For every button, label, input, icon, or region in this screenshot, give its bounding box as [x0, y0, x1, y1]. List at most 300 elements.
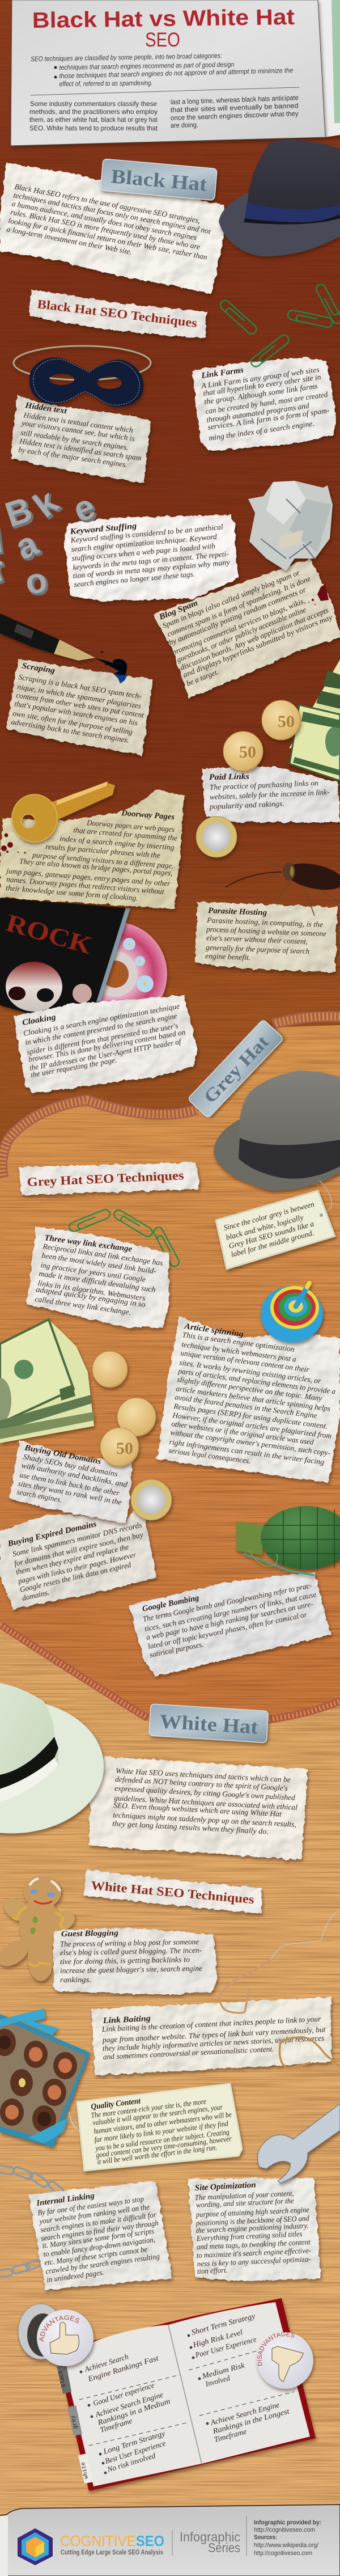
body text: guidelines. White Hat techniques are associated with ethical — [114, 1794, 298, 1812]
note text: Grey Hat SEO sounds like a — [228, 1219, 315, 1250]
body text: advertising back to the search engines. — [11, 717, 130, 745]
body text: expressed quality desires, by citing Google's own published — [114, 1784, 295, 1802]
series label: Series — [208, 2540, 240, 2555]
credits: http://cognitiveseo.com — [254, 2527, 315, 2533]
body text: right infringements can result in the writer facing — [169, 1437, 325, 1466]
body text: adapted quickly by engaging in so — [36, 1285, 146, 1309]
body text: in which the content presented to the search engine — [24, 1012, 177, 1047]
dashed dividers — [79, 2350, 294, 2446]
icon: eye mask — [14, 346, 151, 407]
badge: Black Hat — [100, 159, 217, 200]
body text: They are also known as bridge pages, portal pages, — [19, 857, 173, 877]
body text: A Link Farm is any group of web sites — [200, 365, 320, 390]
body text: search engines is to make it difficult for — [40, 2210, 157, 2234]
badge: advantages: ADVANTAGES — [39, 2315, 79, 2342]
body text: far more likely to link to your website if they find — [94, 2119, 229, 2144]
body text: tices, such as creating large numbers of links, that cause — [144, 1590, 317, 1633]
body text: The practice of purchasing links on — [209, 779, 318, 792]
heading: Paid Links — [209, 772, 249, 782]
heading: Doorway Pages — [121, 809, 175, 822]
series label — [180, 2530, 240, 2555]
tab: white: white — [80, 2461, 90, 2480]
body text: parts of articles, and replacing elements to provide a — [177, 1367, 336, 1396]
body text: unique version of relevant content on their — [180, 1348, 310, 1374]
body text: search engine optimization technique. Keyword — [71, 532, 218, 553]
heading: Parasite Hosting — [208, 906, 267, 917]
intro text: techniques that search engines recommend as part of good design — [59, 61, 235, 71]
panel: google bombing — [129, 1572, 332, 1677]
body text: Cloaking is a search engine optimization technique — [23, 1002, 180, 1038]
credits: http://cognitiveseo.com — [254, 2550, 312, 2557]
body text: serious legal consequences. — [168, 1446, 251, 1465]
title: Black Hat vs White Hat — [32, 5, 295, 33]
tab: black — [57, 2364, 71, 2394]
icon: chocolate box — [0, 2008, 90, 2147]
right column: that their sites will eventually be banned — [171, 101, 299, 114]
body text: be a target. — [185, 667, 220, 688]
main page — [11, 0, 325, 146]
body text: called three way link exchange. — [35, 1295, 131, 1317]
body text: Doorway pages are web pages — [86, 818, 175, 834]
body text: Parasite hosting, in computing, is the — [206, 916, 323, 929]
body text: page from another website. The types of link bait vary tremendously, but — [101, 2025, 326, 2044]
panel: blog spam — [153, 559, 340, 699]
body text: to maximize it's search engine effective- — [196, 2246, 311, 2260]
intro text — [31, 52, 294, 88]
left page: black hat advantages: Engine Rankings Fast — [86, 2353, 160, 2383]
body text: etc. Many of these scripts cannot be — [44, 2245, 148, 2267]
body text: your visitors cannot see, but which is — [20, 418, 135, 443]
heading: Site Optimization — [194, 2180, 256, 2193]
body text: purpose of attaining high search engine — [196, 2205, 309, 2219]
panel: doorway pages — [0, 790, 184, 909]
body text: without the copyright owner's permission, such copy- — [170, 1428, 332, 1457]
body text — [209, 779, 330, 811]
heading: Guest Blogging — [61, 1928, 118, 1939]
heading: Blog Spam — [158, 598, 199, 622]
left page: white hat advantages — [99, 2429, 167, 2474]
icon: white hat — [0, 1683, 104, 1833]
body text: search engines no longer use these tags. — [74, 569, 195, 589]
body text: Scraping is a black hat SEO spam tech- — [18, 672, 143, 700]
heading: Buying Old Domains — [23, 1443, 102, 1466]
body text: techniques and tactics that focus only on search engines and not — [12, 191, 212, 236]
body text: the group. Although some link farms — [203, 382, 318, 406]
thumbs down — [272, 2346, 303, 2382]
body text: purpose of sending visitors to a different page. — [32, 851, 174, 870]
body text: lated or off topic keyword phases, often for comical or — [147, 1610, 308, 1651]
body text — [162, 568, 333, 688]
left page: white hat advantages: Best User Experience — [104, 2439, 167, 2465]
body text: results for particular phrases with the — [45, 842, 160, 860]
body text: you to be a solid resource on their subject. Creating — [94, 2127, 230, 2152]
icon: wrench — [257, 2104, 340, 2183]
body text: browser. This is done by delivering content based on — [28, 1027, 186, 1064]
body text: tion effort. — [197, 2266, 228, 2275]
body text: can be created by hand, most are created — [205, 390, 329, 416]
torn paper — [0, 163, 224, 294]
tag string — [320, 1181, 332, 1215]
body text: that are created for spamming the — [73, 826, 177, 842]
body text: pages with links to their pages. However — [16, 1550, 137, 1585]
body text: Black Hat SEO refers to the use of aggressive SEO strategies, — [14, 182, 201, 225]
left page: black hat advantages: Achieve Search — [83, 2352, 130, 2374]
body text: their knowledge use some form of cloaking. — [6, 883, 138, 902]
body text: avoid the feared penalties in the Search Engine — [175, 1393, 317, 1420]
body text — [23, 1002, 186, 1079]
body text: The terms Google bomb and Googlewashing refer to prac- — [142, 1581, 313, 1623]
icon: grenade — [236, 1506, 340, 1575]
body text: process of hosting a website on someone — [206, 925, 326, 938]
note text: black and white, logically — [225, 1213, 304, 1242]
body text: ming the index of a search engine. — [208, 419, 315, 442]
body text: a web page to have a high ranking for searches on unre- — [146, 1600, 314, 1642]
body text: defended as NOT being contrary to the spirit of Google's — [115, 1775, 288, 1792]
body text: positioning is the backbone of SEO and — [196, 2214, 309, 2227]
body text: index of a search engine by inserting — [60, 834, 175, 852]
body text: it. Many sites use some form of scripts — [41, 2227, 155, 2250]
panel: article spinning — [157, 1317, 340, 1483]
intro text: SEO techniques are classified by some people, into two broad categories: — [31, 52, 222, 63]
note text — [223, 1200, 315, 1259]
tab: black: black — [57, 2370, 67, 2388]
book pages — [65, 2302, 310, 2486]
tab: white — [78, 2454, 94, 2484]
badge: Grey Hat: Grey Hat — [199, 1031, 273, 1107]
left page: grey hat advantages: Rankings in a Medium — [96, 2397, 171, 2427]
body text: rankings. — [60, 1976, 91, 1984]
panel: footer book: SEO — [136, 2532, 164, 2549]
credits: http://www.wikipedia.org/ — [254, 2542, 319, 2549]
body text: Link baiting is the creation of content that incites people to link to your — [101, 2015, 321, 2033]
icon: grey hat — [214, 1071, 340, 1191]
heading: Cloaking — [22, 1013, 57, 1027]
heading: White Hat SEO Techniques — [84, 1869, 262, 1914]
right column: are doing. — [171, 121, 198, 129]
body text: been the most widely used link build- — [41, 1251, 157, 1275]
body text: by automatically posting random comments or — [168, 585, 308, 647]
body text: By far one of the easiest ways to stop — [37, 2194, 144, 2217]
body text: slightly different perspective on the topic. Many — [177, 1375, 322, 1403]
panel: parasite hosting — [195, 902, 337, 972]
body text: Reciprocal links and link exchange has — [42, 1242, 164, 1267]
body text: the user requesting the page. — [30, 1055, 117, 1079]
body text: human visitors, and to other webmasters who will be — [94, 2110, 232, 2135]
icon: black hat — [219, 139, 340, 256]
body text: stuffing occurs when a web page is loaded with — [71, 542, 216, 562]
heading: Grey Hat SEO Techniques — [19, 1162, 199, 1195]
body text: good content can be very time-consuming, however — [96, 2134, 232, 2159]
badge: White Hat — [149, 1704, 269, 1743]
body text: use them to link back to the other — [19, 1470, 121, 1498]
body text: The process of writing a blog post for someone — [60, 1938, 199, 1948]
body text — [200, 365, 330, 442]
body text — [11, 672, 145, 745]
icon: gingerbread man — [0, 1876, 78, 1981]
spine — [168, 2325, 202, 2464]
body text: promoting commercial services to blogs, wikis, — [171, 597, 307, 657]
credits: Sources: — [254, 2534, 277, 2541]
body text: that's popular with search engines on his — [14, 699, 138, 727]
heading: Google Bombing — [142, 1593, 200, 1614]
button back — [18, 2304, 63, 2359]
series label: Infographic — [180, 2530, 240, 2544]
icon: key — [12, 781, 115, 842]
body text: nique, in which the spammer plagiarizes — [17, 682, 142, 710]
body text — [101, 2015, 326, 2061]
body text: The more content-rich your site is, the more — [91, 2097, 207, 2120]
panel: quality content tag — [69, 2084, 242, 2171]
heading: Quality Content — [91, 2096, 142, 2112]
body text: jump pages, gateway pages, entry pages and by other — [5, 866, 171, 888]
right page: white hat disadvantages: Timeframe — [213, 2427, 248, 2444]
right page: black hat disadvantages: High Risk Level — [192, 2328, 244, 2349]
body text — [35, 1242, 164, 1317]
body text: other websites or if the original article was used — [171, 1419, 314, 1446]
body text: This is a search engine optimization — [182, 1330, 295, 1353]
body text: a human audience, and usually does not obey search engines — [11, 199, 198, 242]
body text: The manipulation of your content, — [194, 2189, 294, 2202]
body text: generally for the purpose of search — [206, 943, 310, 955]
body text: tion of words in meta tags may explain why many — [73, 558, 230, 580]
icon: metal letters: B — [1, 490, 37, 535]
body text: services. A link farm is a form of spam- — [207, 406, 330, 432]
body text: that all hyperlink to every other site in — [202, 373, 322, 397]
tag card — [77, 2084, 242, 2171]
thumbs up — [50, 2322, 79, 2354]
left page: white hat advantages: Long Term Strategy — [101, 2429, 166, 2456]
chocolates — [0, 2029, 77, 2133]
body text — [18, 411, 142, 469]
right column: last a long time, whereas black hats anticipate — [171, 94, 299, 106]
icon: metal letters — [0, 482, 100, 602]
body text — [6, 182, 212, 261]
panel: hidden text — [11, 346, 151, 483]
panel: site optimization — [188, 2178, 321, 2281]
album title: ROCK — [3, 909, 95, 959]
panel: buying old domains — [10, 1440, 132, 1524]
right page: white hat disadvantages — [206, 2400, 291, 2444]
body text: crawled by the search engines resulting — [45, 2252, 160, 2275]
icon: compact disc — [63, 922, 167, 1026]
icon: fishing hooks — [219, 1909, 340, 2069]
body text: made it more difficult devaluing such — [39, 1269, 156, 1294]
icon: coins: 50 — [239, 743, 256, 762]
body text — [194, 2189, 311, 2275]
body text: rules. Black Hat SEO is more frequently used by those who are — [10, 208, 201, 251]
body text: White Hat SEO uses techniques and tactics which can be — [116, 1766, 291, 1784]
body text: in unindexed pages. — [46, 2268, 105, 2284]
icon: blood splatter — [1, 834, 26, 854]
icon: dollar bills — [0, 1319, 94, 1443]
body text: satirical purposes. — [149, 1640, 205, 1659]
icon: paper clips — [218, 283, 340, 369]
panel: black hat description — [0, 163, 224, 294]
body text: they include highly informative articles or news stories, useful resources — [102, 2034, 325, 2053]
right column: once the search engines discover what they — [171, 109, 299, 122]
body text: for domains that will expire soon, then buy — [13, 1530, 144, 1568]
left column: Some industry commentators classify these — [30, 100, 157, 108]
right page: grey hat disadvantages — [198, 2361, 246, 2388]
body text: them when they expire and replace the — [15, 1542, 130, 1576]
book cover — [65, 2298, 316, 2491]
skull — [6, 962, 62, 1012]
left column — [29, 100, 158, 132]
body text: domains. — [21, 1588, 50, 1602]
credits: Infographic provided by: — [254, 2519, 321, 2526]
body text — [11, 1520, 144, 1602]
body text: still readable by the search engines. — [20, 428, 129, 452]
left page: grey hat advantages: Achieve Search Engine — [94, 2390, 164, 2419]
panel: paid links — [202, 767, 340, 822]
panel: guest blogging — [53, 1928, 217, 1995]
body text: sites they want to rank well in the — [17, 1479, 122, 1507]
body text — [37, 2194, 160, 2284]
icon: cockroach — [226, 859, 340, 916]
body text — [60, 1938, 202, 1984]
body text: Some link spammers monitor DNS records — [11, 1520, 143, 1558]
icon: coins: 50 — [116, 1439, 133, 1458]
icon: ink blot — [95, 651, 128, 683]
heading: Black Hat SEO Techniques — [29, 289, 207, 339]
body text: and meta tags, to tweaking the content — [196, 2237, 311, 2251]
heading: Black Hat SEO Techniques: Black Hat SEO Techniques — [36, 297, 198, 330]
body text: your website from ranking well on the — [38, 2202, 150, 2226]
body text: Results pages (SERP) for using duplicate content. — [173, 1402, 328, 1431]
heading: Hidden text — [24, 401, 68, 416]
body text: However, if the original articles are plagiarized from — [172, 1411, 332, 1440]
icon: dollar bills — [289, 659, 340, 781]
body text: else's server without their consent, — [206, 933, 308, 946]
body text: Everything from creating solid titles — [196, 2230, 303, 2243]
body text — [16, 1452, 128, 1507]
body text: own site, often for the purpose of selling — [12, 709, 133, 736]
icon: metal letters: o — [23, 560, 49, 602]
logo: cognitiveSEO hexagon — [18, 2528, 53, 2565]
left column: SEO. White hats tend to produce results that — [29, 124, 158, 132]
ribbon — [0, 2008, 58, 2036]
badge: disadvantages: DISADVANTAGES — [257, 2332, 295, 2366]
panel: link baiting — [91, 1997, 332, 2075]
facing page edge — [318, 0, 340, 137]
body text: ness is key to any successful optimiza- — [197, 2254, 311, 2268]
panel: scraping — [6, 659, 153, 755]
right page: white hat disadvantages: Achieve Search Engine — [209, 2400, 280, 2427]
intro text: those techniques that search engines do not approve of and attempt to minimize the — [59, 66, 294, 80]
left page: white hat advantages: No risk involved — [106, 2451, 156, 2474]
icon: metal letters: e — [67, 487, 100, 530]
body text — [142, 1581, 317, 1659]
badge: advantages — [17, 2303, 96, 2370]
body text — [112, 1766, 298, 1835]
panel: three way link exchange — [26, 1226, 169, 1328]
icon: coins — [196, 700, 300, 857]
panel: white hat description — [89, 1757, 308, 1860]
body text: tive for doing this, is getting backlinks to — [60, 1955, 190, 1966]
left column: methods, and the practitioners who employ — [29, 108, 158, 116]
brand name: COGNITIVE — [60, 2532, 136, 2549]
button face — [37, 2309, 94, 2366]
icon: metal letters: a — [10, 523, 44, 568]
right page: grey hat disadvantages: Medium Risk — [201, 2361, 246, 2380]
body text: the search engine positioning industry. — [196, 2221, 309, 2235]
body text: names. Doorway pages that redirect visitors without — [6, 875, 165, 896]
body text — [205, 916, 326, 962]
right page: black hat disadvantages — [188, 2311, 257, 2359]
body text: with authority and backlinks, and — [20, 1461, 128, 1489]
body text: Hidden text is textual content which — [23, 411, 134, 434]
panel: buying expired domains — [0, 1508, 156, 1609]
heading: Scraping — [21, 661, 56, 675]
icon: coins — [92, 1351, 172, 1520]
rope between black and grey sections — [2, 1017, 340, 1178]
icon: fountain pen — [0, 614, 95, 661]
body text: to enable fancy drop-down navigation, — [42, 2235, 156, 2258]
badge: White Hat: White Hat — [159, 1710, 259, 1739]
body text: popularity and rakings. — [209, 799, 284, 811]
body text: else's blog is called guest blogging. The incen- — [60, 1946, 202, 1957]
icon: CD case with skull — [0, 898, 130, 1013]
body text — [91, 2097, 232, 2166]
intro text: effect of, referred to as spamdexing. — [59, 79, 153, 88]
badge: Grey Hat — [188, 1019, 284, 1118]
intro book — [11, 0, 340, 146]
body text: SEO. Even though websites which are using White Hat — [113, 1801, 282, 1818]
body text: Keyword stuffing is considered to be an unethical — [70, 522, 223, 544]
icon: chains — [0, 2165, 65, 2278]
body text: article marketers believe that article spinning helps — [176, 1384, 331, 1413]
body text: websites, solely for the increase in link- — [209, 788, 330, 801]
subtitle: SEO — [145, 29, 180, 51]
body text: techniques might not suddenly pop up on the search results, — [113, 1811, 296, 1829]
heading: Keyword Stuffing — [69, 522, 137, 536]
body text: search engines. — [16, 1487, 63, 1504]
panel: advantages and disadvantages book — [57, 2298, 316, 2491]
heading: Three way link exchange — [44, 1233, 133, 1254]
left column: them, as either white hat, black hat or grey hat — [29, 116, 158, 124]
body text: it will be well worth the effort in the long run. — [97, 2143, 218, 2166]
body text: ing practice for years until Google — [40, 1260, 146, 1284]
body text: increase the guest blogger's site, search engine — [60, 1964, 202, 1975]
tab: grey — [67, 2405, 82, 2436]
body text: Shady SEOs buy old domains — [22, 1452, 118, 1478]
note text: label for the middle ground. — [230, 1228, 315, 1259]
panel: cloaking — [14, 995, 197, 1093]
icon: blood splatter — [308, 584, 329, 605]
body text: comment spam is a form of spamdexing. It is done — [166, 574, 312, 638]
left page: grey hat advantages: Good User experience — [92, 2381, 155, 2408]
body text: and sometimes controversial or sensationalistic content. — [103, 2045, 274, 2061]
panel: link farms — [192, 357, 336, 451]
heading: Grey Hat SEO Techniques: Grey Hat SEO Techniques — [27, 1168, 184, 1189]
panel: grey hat note tag — [216, 1181, 335, 1269]
tag string — [69, 2112, 88, 2137]
tagline: Cutting Edge Large Scale SEO Analysis — [61, 2548, 163, 2556]
body text: guestbooks, or other publicly accessible online — [176, 605, 307, 664]
icon: metal letters: k — [26, 482, 66, 525]
body text: discussion boards. Any web application that accepts — [179, 606, 330, 672]
right page: black hat disadvantages: Short Term Strategy — [190, 2311, 256, 2337]
page corner image — [332, 0, 340, 123]
body text: a long-term investment on their Web site. — [6, 225, 133, 256]
body text: Hidden text is identified as search spam — [19, 437, 142, 462]
tab: grey: grey — [70, 2415, 79, 2429]
heading: Link Baiting — [102, 2014, 151, 2025]
heading: Article spinning — [183, 1322, 244, 1339]
body text: technique by which webmasters post a — [181, 1340, 297, 1364]
heading: Buying Expired Domains — [6, 1520, 97, 1549]
body text: they get long lasting results when they finally do. — [112, 1819, 269, 1835]
